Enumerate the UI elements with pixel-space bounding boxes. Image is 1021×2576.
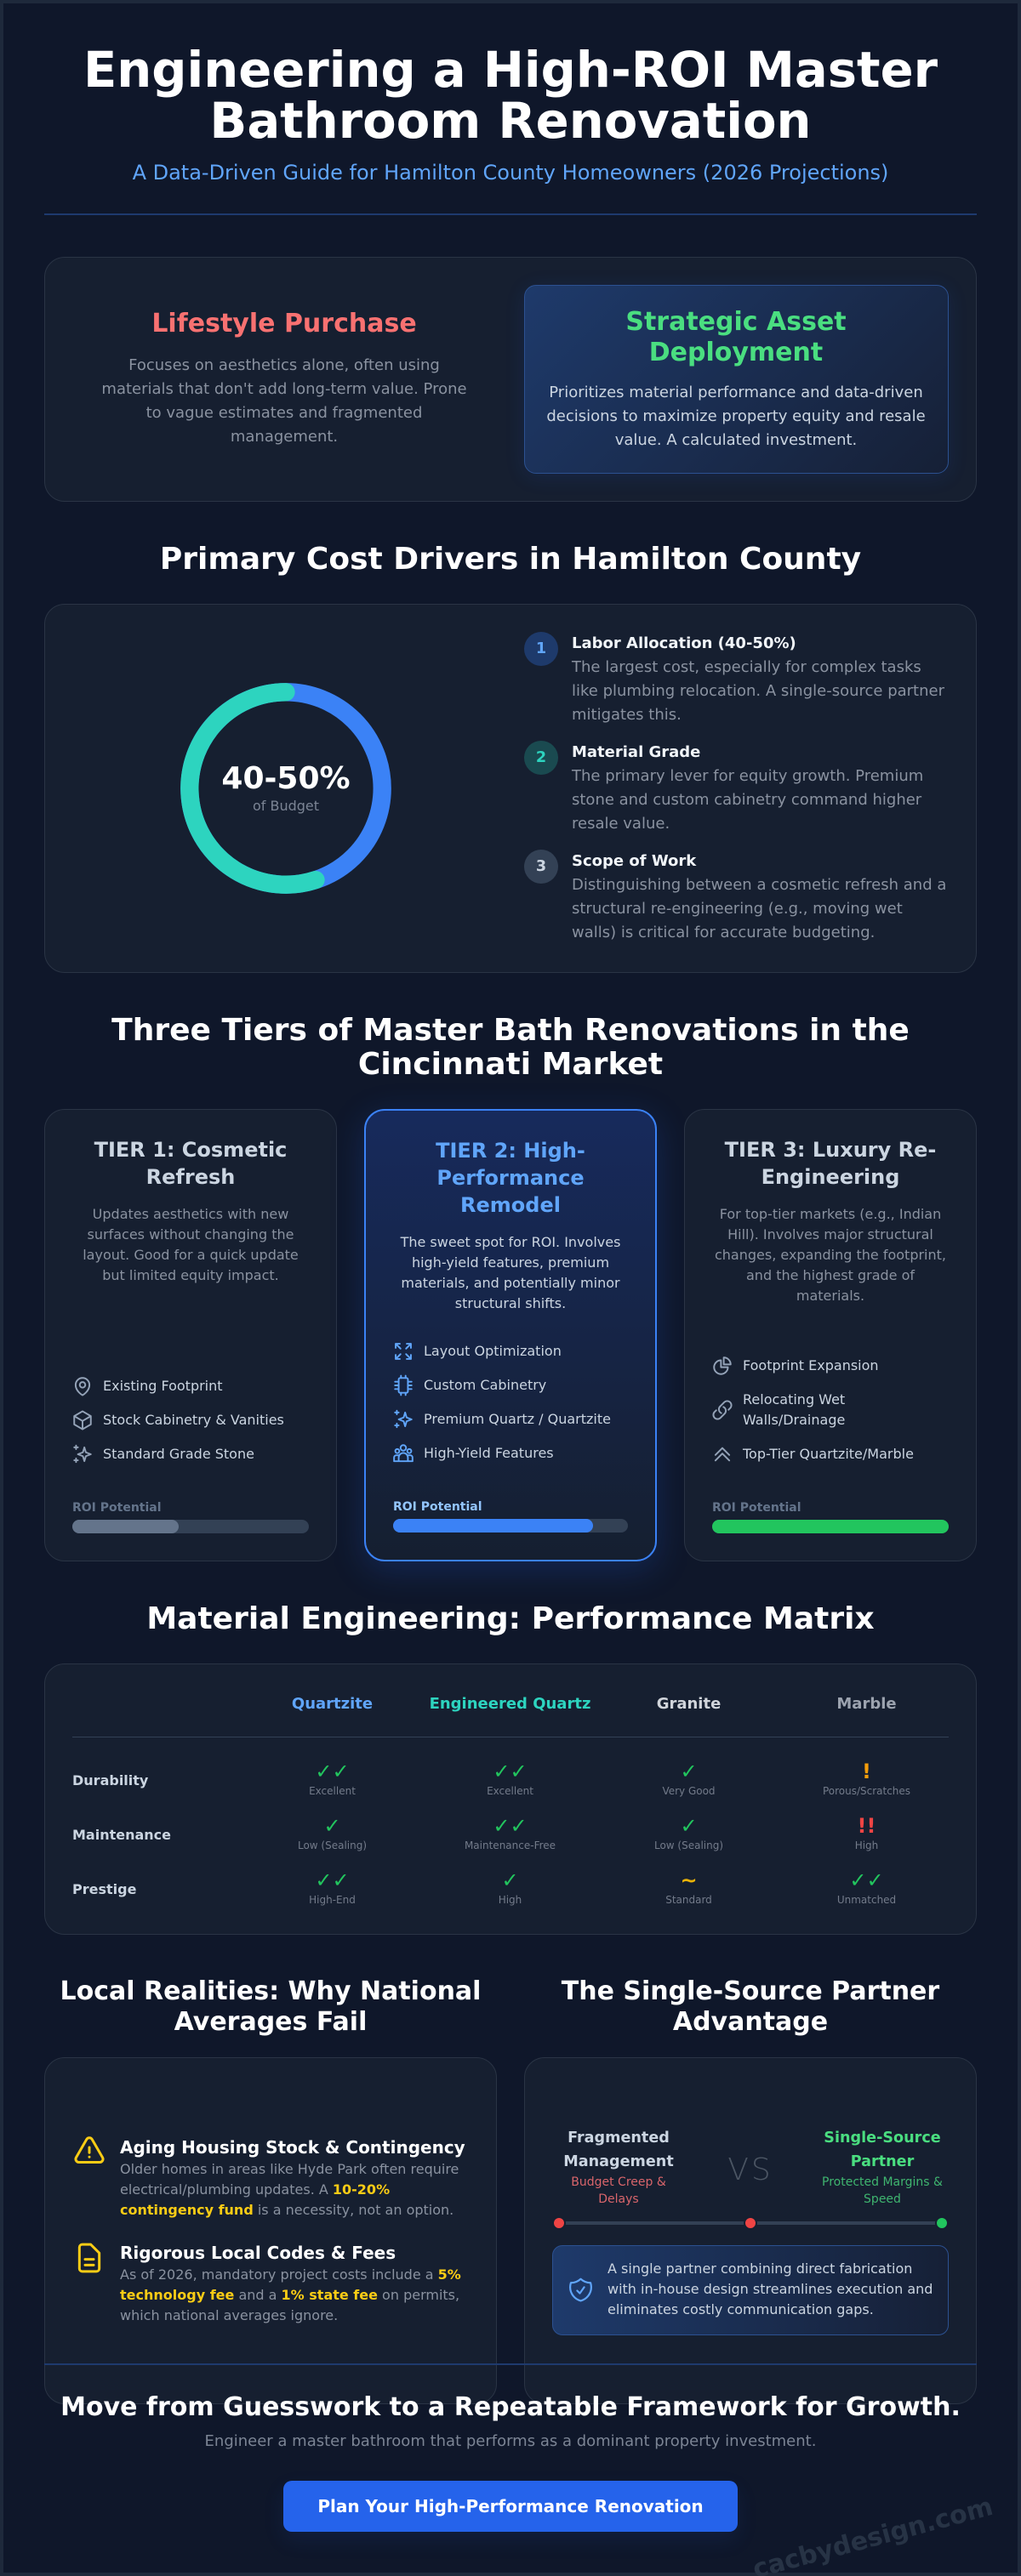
number badge 3: 3: [536, 858, 546, 875]
column head: quartzite: Quartzite: [292, 1695, 373, 1713]
fragmented sub: [533, 2174, 704, 2208]
fragmented sub: Delays: [598, 2192, 639, 2206]
cell: [309, 1868, 356, 1906]
icon: sparkle: [73, 1444, 92, 1463]
feature text: Top-Tier Quartzite/Marble: [743, 1446, 914, 1462]
roi label: ROI Potential: [393, 1500, 482, 1514]
heading: local realities: Averages Fail: [174, 2007, 367, 2037]
cell: High: [855, 1840, 878, 1851]
tier 2 heading: Performance: [436, 1166, 585, 1190]
driver 2 text: resale value.: [572, 815, 670, 833]
row label: durability: Durability: [72, 1772, 148, 1788]
call to action button: [283, 2481, 738, 2532]
driver 2 text: stone and custom cabinetry command higher: [572, 791, 921, 809]
icon: pie chart: [713, 1356, 732, 1375]
cell: [665, 1868, 712, 1906]
driver 1 text: like plumbing relocation. A single-source partner: [572, 682, 944, 700]
feature text: Layout Optimization: [424, 1343, 562, 1359]
icon: warning: [72, 2135, 106, 2169]
driver 1 text: The largest cost, especially for complex tasks: [572, 658, 921, 676]
icon: double chevron: [715, 1447, 730, 1461]
cell: ✓✓: [849, 1868, 884, 1892]
feature text: Walls/Drainage: [743, 1412, 845, 1428]
icon: shield: [567, 2276, 595, 2304]
driver 3 text: Distinguishing between a cosmetic refresh and a: [572, 876, 946, 894]
feature text: Custom Cabinetry: [424, 1377, 546, 1393]
cell: [309, 1760, 356, 1797]
feature text: High-Yield Features: [424, 1445, 554, 1461]
tier 1 text: surfaces without changing the: [88, 1226, 294, 1243]
driver 3 text: structural re-engineering (e.g., moving wet: [572, 900, 903, 918]
cell: Excellent: [309, 1785, 356, 1797]
cell: [298, 1814, 367, 1851]
lifestyle heading: Lifestyle Purchase: [151, 309, 417, 338]
item title: Aging Housing Stock & Contingency: [120, 2137, 465, 2158]
strategic text: Prioritizes material performance and data-driven: [549, 384, 923, 401]
cell: [662, 1760, 716, 1797]
strategic text: [546, 384, 926, 449]
fragmented heading: [533, 2126, 704, 2174]
cell: ✓✓: [315, 1868, 350, 1892]
panel: tier 3: [684, 1109, 977, 1561]
number badge 1: 1: [536, 640, 546, 657]
tier 2 text: materials, and potentially minor: [401, 1275, 620, 1291]
cell: Porous/Scratches: [823, 1785, 910, 1797]
callout text: with in-house design streamlines execution and: [607, 2281, 933, 2297]
cell: [487, 1760, 533, 1797]
cell: ✓✓: [315, 1760, 350, 1783]
cell: Standard: [665, 1894, 712, 1906]
cell: ✓✓: [493, 1760, 528, 1783]
cell: [499, 1868, 522, 1906]
fragmented heading: Management: [563, 2153, 674, 2170]
driver 2 text: The primary lever for equity growth. Premium: [572, 767, 923, 785]
single source sub: Speed: [864, 2192, 901, 2206]
title: Bathroom Renovation: [209, 93, 812, 150]
callout text: [607, 2259, 933, 2320]
green dot: [935, 2216, 949, 2230]
tier 2 text: The sweet spot for ROI. Involves: [401, 1234, 620, 1250]
tier 2 heading: TIER 2: High-: [436, 1139, 585, 1163]
column head: granite: Granite: [657, 1695, 721, 1713]
tier 1 heading: [94, 1138, 287, 1189]
tier 3 heading: TIER 3: Luxury Re-: [725, 1138, 936, 1162]
heading: local realities: Local Realities: Why National: [60, 1976, 481, 2006]
tier 3 text: [715, 1206, 946, 1304]
vs label: VS: [727, 2152, 773, 2187]
heading: local realities: [60, 1976, 481, 2037]
call to action button: Plan Your High-Performance Renovation: [317, 2496, 704, 2516]
tier 2 heading: Remodel: [460, 1193, 561, 1217]
tier 2 text: structural shifts.: [455, 1295, 566, 1311]
roi label: ROI Potential: [712, 1501, 801, 1515]
cell: Low (Sealing): [298, 1840, 367, 1851]
feature text: Stock Cabinetry & Vanities: [103, 1412, 284, 1428]
tier 3 heading: [725, 1138, 936, 1189]
single source heading: [797, 2126, 967, 2174]
strategic heading: [625, 307, 847, 367]
lifestyle text: to vague estimates and fragmented: [146, 404, 422, 422]
single source heading: Partner: [851, 2153, 914, 2170]
footer subtext: Engineer a master bathroom that performs as a dominant property investment.: [205, 2432, 816, 2450]
tier 1 text: layout. Good for a quick update: [83, 1247, 299, 1263]
tier 1 text: but limited equity impact.: [102, 1267, 279, 1283]
panel: lifestyle vs strategic: [44, 257, 977, 502]
title: [83, 42, 938, 150]
lifestyle text: Focuses on aesthetics alone, often using: [128, 356, 440, 374]
roi label: ROI Potential: [72, 1501, 162, 1515]
tier 3 text: and the highest grade of: [746, 1267, 915, 1283]
footer heading: Move from Guesswork to a Repeatable Framework for Growth.: [60, 2392, 961, 2422]
cell: ✓: [501, 1868, 519, 1892]
feature text: Premium Quartz / Quartzite: [424, 1411, 611, 1427]
cell: [465, 1814, 556, 1851]
callout text: A single partner combining direct fabrication: [607, 2260, 912, 2277]
panel: performance matrix: [44, 1663, 977, 1935]
item title: Rigorous Local Codes & Fees: [120, 2243, 396, 2263]
cell: !!: [858, 1814, 876, 1838]
tier 1 text: Updates aesthetics with new: [93, 1206, 288, 1222]
donut chart: [180, 683, 391, 894]
driver 3 text: walls) is critical for accurate budgeting.: [572, 924, 875, 941]
strategic text: value. A calculated investment.: [615, 431, 857, 449]
icon: sparkle: [394, 1410, 413, 1429]
lifestyle text: management.: [231, 428, 338, 446]
cell: Excellent: [487, 1785, 533, 1797]
number badge 2: 2: [536, 749, 546, 766]
fragmented heading: Fragmented: [568, 2130, 670, 2147]
panel: local realities: [44, 2057, 497, 2404]
feature text: Existing Footprint: [103, 1378, 223, 1394]
cell: High: [499, 1894, 522, 1906]
tier 3 text: Hill). Involves major structural: [727, 1226, 933, 1243]
cell: ✓: [680, 1814, 698, 1838]
item text: [120, 2159, 459, 2221]
feature text: [743, 1391, 845, 1428]
roi bar: [72, 1520, 309, 1533]
tier 1 heading: Refresh: [146, 1165, 235, 1189]
icon: link: [713, 1400, 732, 1420]
heading: three tiers: [111, 1013, 910, 1082]
item text: technology fee and a 1% state fee on permits,: [120, 2287, 459, 2303]
number badge 2: [524, 741, 558, 775]
cell: [837, 1868, 896, 1906]
row label: prestige: Prestige: [72, 1881, 136, 1897]
feature text: Footprint Expansion: [743, 1357, 879, 1373]
cell: Unmatched: [837, 1894, 896, 1906]
red dot: [744, 2216, 757, 2230]
tier 1 heading: TIER 1: Cosmetic: [94, 1138, 287, 1162]
item text: which national averages ignore.: [120, 2307, 338, 2323]
item text: [120, 2265, 461, 2326]
number badge 3: [524, 850, 558, 884]
lifestyle text: materials that don't add long-term value. Prone: [101, 380, 467, 398]
subtitle: A Data-Driven Guide for Hamilton County Homeowners (2026 Projections): [133, 161, 888, 185]
cell: Low (Sealing): [654, 1840, 723, 1851]
footer divider: [44, 2363, 977, 2365]
item text: Older homes in areas like Hyde Park often require: [120, 2161, 459, 2177]
tier 3 text: materials.: [796, 1288, 864, 1304]
donut value: 40-50%: [221, 761, 351, 796]
panel: tier 1: [44, 1109, 337, 1561]
tier 2 heading: [436, 1139, 585, 1217]
panel: tier 2: [364, 1109, 657, 1561]
tier 3 text: changes, expanding the footprint,: [715, 1247, 946, 1263]
red dot: [552, 2216, 566, 2230]
heading: cost drivers: Primary Cost Drivers in Hamilton County: [160, 542, 861, 577]
tier 2 text: high-yield features, premium: [412, 1254, 609, 1271]
lifestyle text: [101, 356, 467, 446]
heading: material matrix: Material Engineering: Performance Matrix: [146, 1601, 875, 1636]
cell: [654, 1814, 723, 1851]
item text: contingency fund is a necessity, not an option.: [120, 2202, 453, 2218]
feature text: Standard Grade Stone: [103, 1446, 254, 1462]
tier 3 heading: Engineering: [761, 1165, 899, 1189]
heading: three tiers: Three Tiers of Master Bath Renovations in the: [111, 1013, 910, 1048]
icon: chip: [394, 1374, 413, 1396]
driver 2 text: [572, 767, 923, 833]
icon: people: [393, 1444, 414, 1463]
heading: single source: The Single-Source Partner: [562, 1976, 939, 2006]
row label: maintenance: Maintenance: [72, 1827, 171, 1843]
strategic text: decisions to maximize property equity and resale: [546, 407, 926, 425]
driver 3 title: Scope of Work: [572, 852, 696, 870]
tier 1 text: [83, 1206, 299, 1283]
comparison track: [552, 2216, 949, 2230]
roi bar: [393, 1519, 628, 1533]
driver 1 text: mitigates this.: [572, 706, 682, 724]
cell: [823, 1760, 910, 1797]
icon: cube: [73, 1410, 92, 1430]
donut label: of Budget: [253, 798, 319, 814]
single source sub: Protected Margins &: [822, 2175, 943, 2189]
strategic heading: Strategic Asset: [625, 307, 847, 337]
callout text: eliminates costly communication gaps.: [607, 2301, 874, 2317]
callout: [552, 2245, 949, 2335]
feature text: Relocating Wet: [743, 1391, 845, 1407]
icon: expand: [395, 1343, 412, 1360]
icon: map pin: [75, 1377, 90, 1396]
tier 3 text: For top-tier markets (e.g., Indian: [720, 1206, 941, 1222]
header divider: [44, 213, 977, 215]
driver 3 text: [572, 876, 946, 941]
strategic heading: Deployment: [649, 338, 823, 367]
item text: electrical/plumbing updates. A 10-20%: [120, 2181, 390, 2198]
title: Engineering a High-ROI Master: [83, 42, 938, 99]
cell: !: [862, 1760, 871, 1783]
cell: ✓: [323, 1814, 341, 1838]
panel: single source: [524, 2057, 977, 2404]
cell: ~: [680, 1868, 698, 1892]
cell: High-End: [309, 1894, 356, 1906]
heading: three tiers: Cincinnati Market: [358, 1047, 663, 1082]
fragmented sub: Budget Creep &: [571, 2175, 666, 2189]
heading: single source: Advantage: [673, 2007, 828, 2037]
panel: cost drivers: [44, 604, 977, 973]
cell: [855, 1814, 878, 1851]
cell: ✓: [680, 1760, 698, 1783]
driver 1 text: [572, 658, 944, 724]
roi bar: [712, 1520, 949, 1533]
single source heading: Single-Source: [824, 2130, 941, 2147]
cell: ✓✓: [493, 1814, 528, 1838]
column head: marble: Marble: [836, 1695, 897, 1713]
driver 2 title: Material Grade: [572, 743, 700, 761]
driver 1 title: Labor Allocation (40-50%): [572, 634, 796, 652]
cell: Maintenance-Free: [465, 1840, 556, 1851]
column head: engineered quartz: Engineered Quartz: [430, 1695, 590, 1713]
cell: Very Good: [662, 1785, 716, 1797]
number badge 1: [524, 632, 558, 666]
tier 2 text: [400, 1234, 620, 1311]
single source sub: [797, 2174, 967, 2208]
strategic asset box: [524, 285, 949, 474]
heading: single source: [562, 1976, 939, 2037]
item text: As of 2026, mandatory project costs include a 5%: [120, 2266, 461, 2283]
icon: document: [72, 2241, 106, 2275]
